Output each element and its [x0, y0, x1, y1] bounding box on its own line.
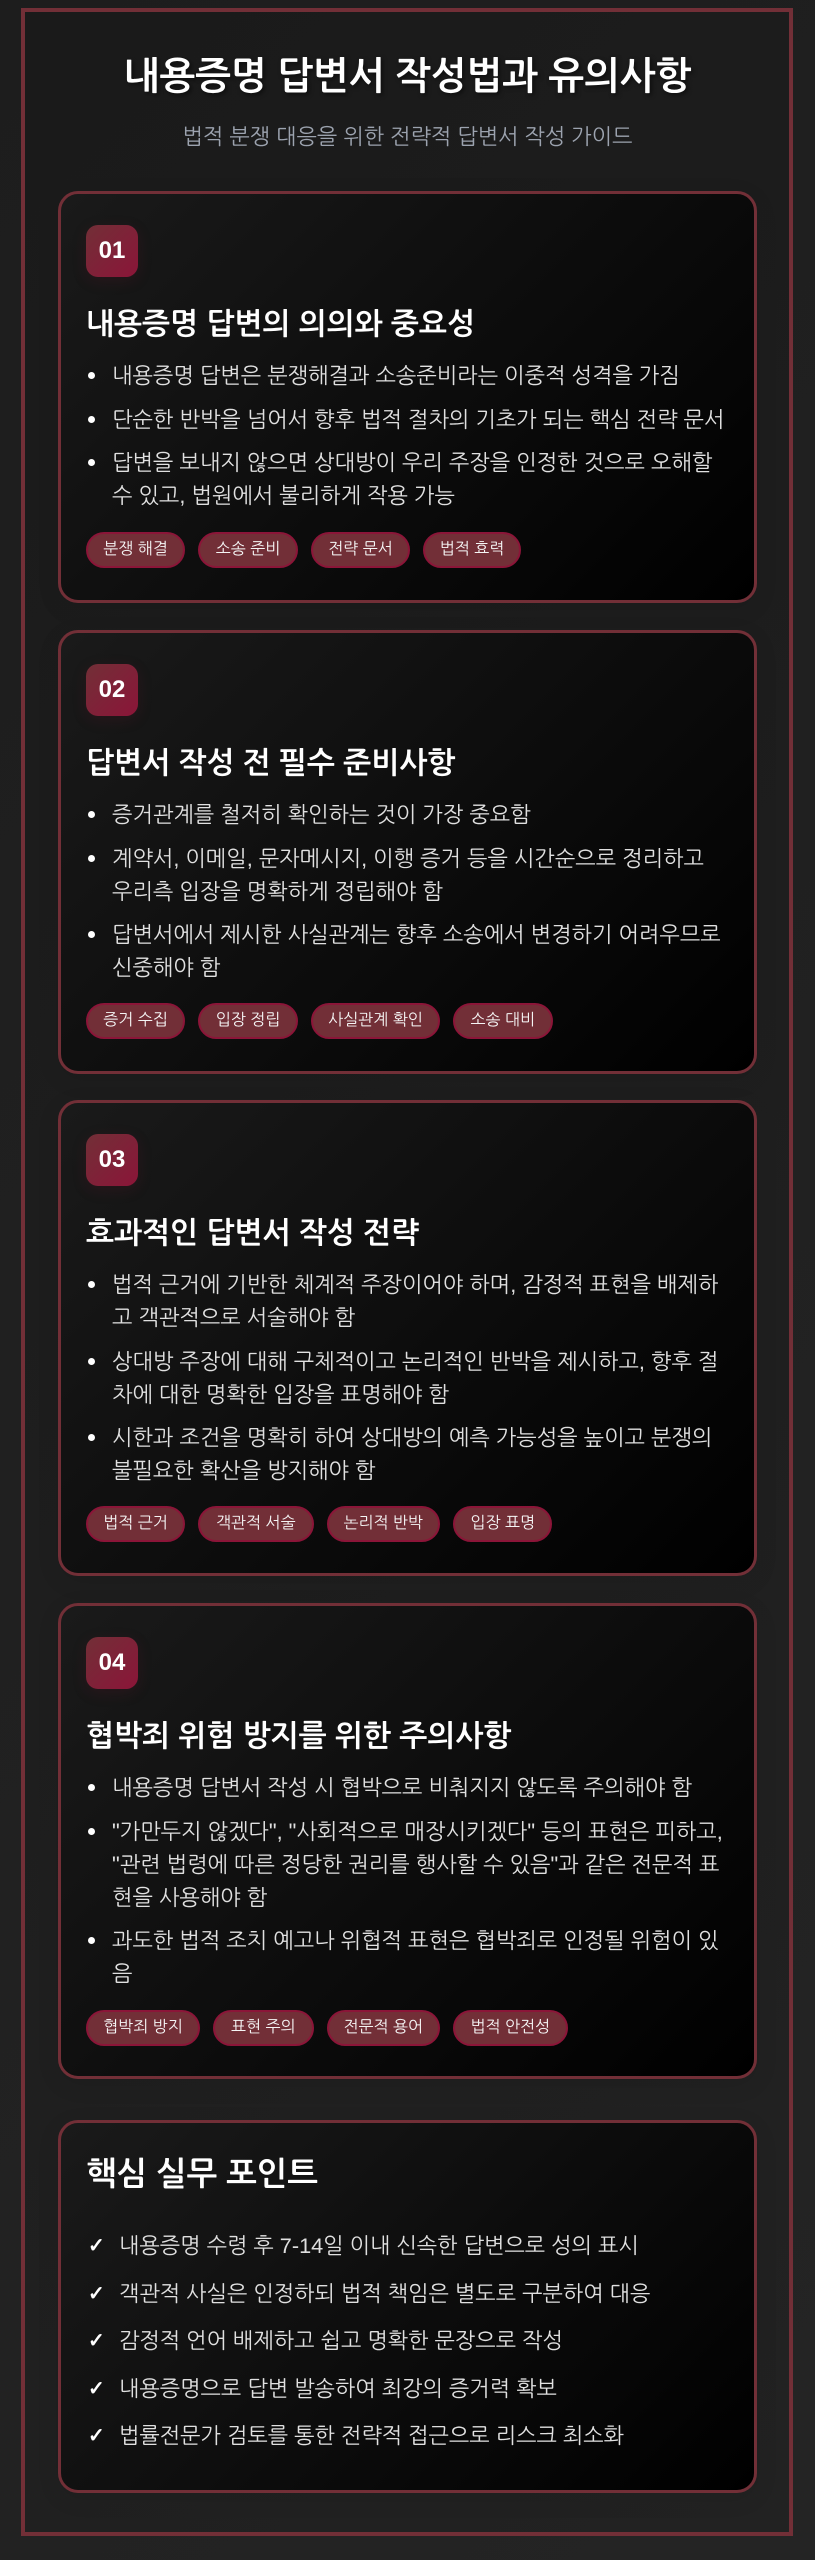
panel: key practical points: 감정적 언어 배제하고 쉽고 명확한 문장으로 작성 — [119, 2328, 563, 2353]
panel: section 03 — [58, 1100, 757, 1576]
tags 01 — [86, 532, 521, 568]
tags 02: 증거 수집 — [103, 1012, 168, 1029]
panel: key practical points: ✓ — [88, 2423, 105, 2447]
tags 01: 소송 준비 — [216, 541, 280, 558]
bullet list 04: 현을 사용해야 함 — [112, 1884, 267, 1910]
tags 01: 분쟁 해결 — [103, 541, 168, 558]
bullet list 03: 상대방 주장에 대해 구체적이고 논리적인 반박을 제시하고, 향후 절 — [112, 1348, 718, 1374]
bullet list 04: "가만두지 않겠다", "사회적으로 매장시키겠다" 등의 표현은 피하고, — [112, 1818, 723, 1844]
bullet list 04: 음 — [112, 1961, 132, 1986]
tags 03: 법적 근거 — [103, 1515, 168, 1532]
bullet list 03: 고 객관적으로 서술해야 함 — [112, 1305, 355, 1330]
bullet list 03: 시한과 조건을 명확히 하여 상대방의 예측 가능성을 높이고 분쟁의 — [112, 1425, 712, 1450]
tags 03: 객관적 서술 — [216, 1515, 296, 1532]
panel: key practical points: 내용증명 수령 후 7-14일 이내 신속한 답변으로 성의 표시 — [119, 2233, 639, 2258]
badge 02 — [86, 664, 138, 716]
tags 01: 법적 효력 — [440, 541, 504, 558]
tags 01: 전략 문서 — [328, 541, 393, 558]
badge 04 — [86, 1637, 138, 1689]
heading 02: 답변서 작성 전 필수 준비사항 — [86, 747, 455, 780]
panel: key practical points: 법률전문가 검토를 통한 전략적 접근으로 리스크 최소화 — [119, 2423, 624, 2448]
panel: section 02 — [58, 630, 757, 1074]
bullet list 02: 계약서, 이메일, 문자메시지, 이행 증거 등을 시간순으로 정리하고 — [112, 846, 704, 870]
bullet list 04: 내용증명 답변서 작성 시 협박으로 비춰지지 않도록 주의해야 함 — [112, 1775, 692, 1800]
tags 04: 표현 주의 — [231, 2019, 296, 2036]
tags 04: 협박죄 방지 — [103, 2019, 183, 2036]
bullet list 02 — [88, 802, 721, 980]
bullet list 03: 차에 대한 명확한 입장을 표명해야 함 — [112, 1382, 449, 1406]
panel: key practical points — [58, 2120, 757, 2493]
bullet list 04: "관련 법령에 따른 정당한 권리를 행사할 수 있음"과 같은 전문적 표 — [112, 1852, 719, 1876]
bullet list 01: 답변을 보내지 않으면 상대방이 우리 주장을 인정한 것으로 오해할 — [112, 450, 712, 475]
heading: key points: 핵심 실무 포인트 — [86, 2156, 318, 2192]
bullet list 02: 우리측 입장을 명확하게 정립해야 함 — [112, 878, 443, 904]
panel: key practical points: 내용증명으로 답변 발송하여 최강의 증거력 확보 — [119, 2376, 557, 2400]
tags 04 — [86, 2010, 568, 2046]
heading 03: 효과적인 답변서 작성 전략 — [86, 1217, 419, 1250]
panel: key practical points: 객관적 사실은 인정하되 법적 책임은 별도로 구분하여 대응 — [119, 2280, 650, 2306]
heading 01: 내용증명 답변의 의의와 중요성 — [86, 308, 475, 341]
bullet list 01 — [88, 363, 724, 508]
panel: section 04 — [58, 1603, 757, 2079]
bullet list 03: 법적 근거에 기반한 체계적 주장이어야 하며, 감정적 표현을 배제하 — [112, 1272, 718, 1297]
panel: key practical points: ✓ — [88, 2376, 105, 2400]
bullet list 02: 답변서에서 제시한 사실관계는 향후 소송에서 변경하기 어려우므로 — [112, 922, 721, 947]
checklist — [88, 2233, 650, 2448]
panel: key practical points: ✓ — [88, 2280, 105, 2304]
badge 02: 02 — [99, 676, 125, 703]
bullet list 02: 증거관계를 철저히 확인하는 것이 가장 중요함 — [112, 802, 531, 827]
tags 02 — [86, 1003, 553, 1039]
badge 01 — [86, 225, 138, 277]
subtitle: 법적 분쟁 대응을 위한 전략적 답변서 작성 가이드 — [183, 124, 632, 149]
heading 04: 협박죄 위험 방지를 위한 주의사항 — [86, 1720, 511, 1753]
tags 03 — [86, 1506, 552, 1542]
bullet list 01: 수 있고, 법원에서 불리하게 작용 가능 — [112, 483, 455, 508]
tags 02: 소송 대비 — [470, 1012, 535, 1029]
panel: key practical points: ✓ — [88, 2328, 105, 2352]
tags 03: 입장 표명 — [470, 1515, 535, 1532]
bullet list 02: 신중해야 함 — [112, 955, 220, 980]
bullet list 03 — [88, 1272, 718, 1483]
bullet list 04 — [88, 1775, 723, 1986]
bullet list 03: 불필요한 확산을 방지해야 함 — [112, 1458, 375, 1483]
panel: key practical points: ✓ — [88, 2233, 105, 2257]
tags 02: 사실관계 확인 — [328, 1012, 423, 1029]
title: 내용증명 답변서 작성법과 유의사항 — [124, 56, 691, 98]
badge 04: 04 — [99, 1649, 125, 1676]
tags 04: 법적 안전성 — [470, 2019, 550, 2036]
tags 02: 입장 정립 — [216, 1012, 280, 1029]
bullet list 01: 단순한 반박을 넘어서 향후 법적 절차의 기초가 되는 핵심 전략 문서 — [112, 406, 724, 432]
badge 03 — [86, 1134, 138, 1186]
panel: section 01 — [58, 191, 757, 603]
bullet list 01: 내용증명 답변은 분쟁해결과 소송준비라는 이중적 성격을 가짐 — [112, 363, 680, 388]
badge 01: 01 — [99, 237, 125, 264]
badge 03: 03 — [99, 1146, 125, 1173]
bullet list 04: 과도한 법적 조치 예고나 위협적 표현은 협박죄로 인정될 위험이 있 — [112, 1928, 718, 1953]
tags 04: 전문적 용어 — [343, 2019, 423, 2036]
tags 03: 논리적 반박 — [343, 1515, 423, 1532]
